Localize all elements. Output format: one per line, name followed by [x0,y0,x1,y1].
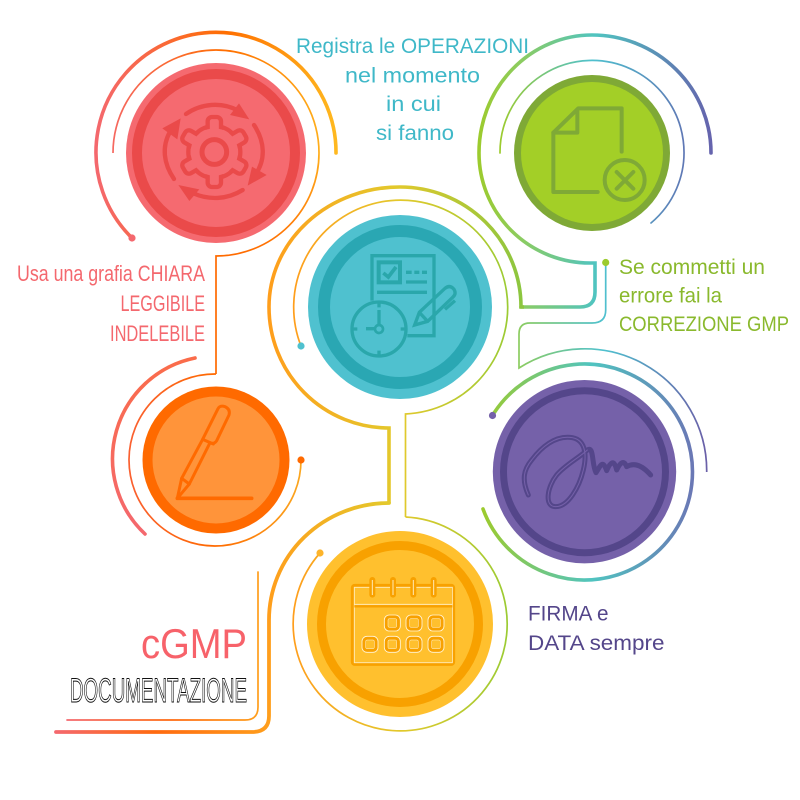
orange disc [142,386,290,534]
red thin arc lower part and connector [216,153,319,374]
bottom thin line [67,572,258,720]
teal thin arc [294,200,508,517]
green thin arc [500,60,684,223]
text: GMP correction: errore fai la [619,284,722,308]
teal disc [308,215,492,399]
orange dot [297,456,305,464]
connector dot [602,259,609,266]
bottom thick line [56,503,389,732]
text: signature and date: FIRMA e [528,602,608,626]
green disc [514,75,670,231]
orange thin arc [129,374,301,546]
icon: document with cross [553,108,645,200]
title: DOCUMENTAZIONE: DOCUMENTAZIONE [70,672,247,710]
panel: yellow calendar step [293,517,507,731]
panel: orange pen step [113,358,305,546]
text: register operations: si fanno [376,121,454,145]
text: register operations [296,34,529,145]
icon: gear with rotating arrows [162,103,267,201]
yellow dot [316,549,324,557]
text: signature and date: DATA sempre [528,631,664,655]
panel: red gear step [96,32,336,374]
panel: teal checklist step [294,200,508,517]
icon: checklist, clock and pencil [352,256,455,356]
teal dot [297,342,305,350]
text: handwriting: Usa una grafia CHIARA [17,261,205,286]
text: handwriting: INDELEBILE [110,321,205,346]
text: GMP correction [619,256,789,336]
red thin arc [113,50,319,153]
icon: pen [177,406,252,498]
text: handwriting: LEGGIBILE [120,291,205,316]
panel: purple signature step [483,259,707,580]
text: GMP correction: Se commetti un [619,256,765,279]
yellow disc [307,531,493,717]
title [70,620,247,710]
green thick arc and connector [479,35,711,307]
text: handwriting [17,261,205,346]
orange thick arc [113,358,195,534]
panel: green document correction step [479,35,711,307]
purple thick arc [483,364,692,580]
icon: signature [524,437,651,507]
purple dot [489,412,496,419]
text: signature and date [528,602,664,655]
title: cGMP: cGMP [141,620,247,667]
icon: calendar [353,577,453,664]
red disc [126,63,306,243]
yellow thin arc [293,517,507,731]
red thick arc [96,32,336,238]
purple thin connector and arc [519,263,707,472]
text: register operations: Registra le OPERAZIONI [296,34,529,58]
purple disc [493,380,676,563]
red dot [128,234,136,242]
teal thick arc from yellow join around checklist [269,187,524,503]
text: register operations: in cui [386,92,441,116]
text: register operations: nel momento [345,64,480,88]
